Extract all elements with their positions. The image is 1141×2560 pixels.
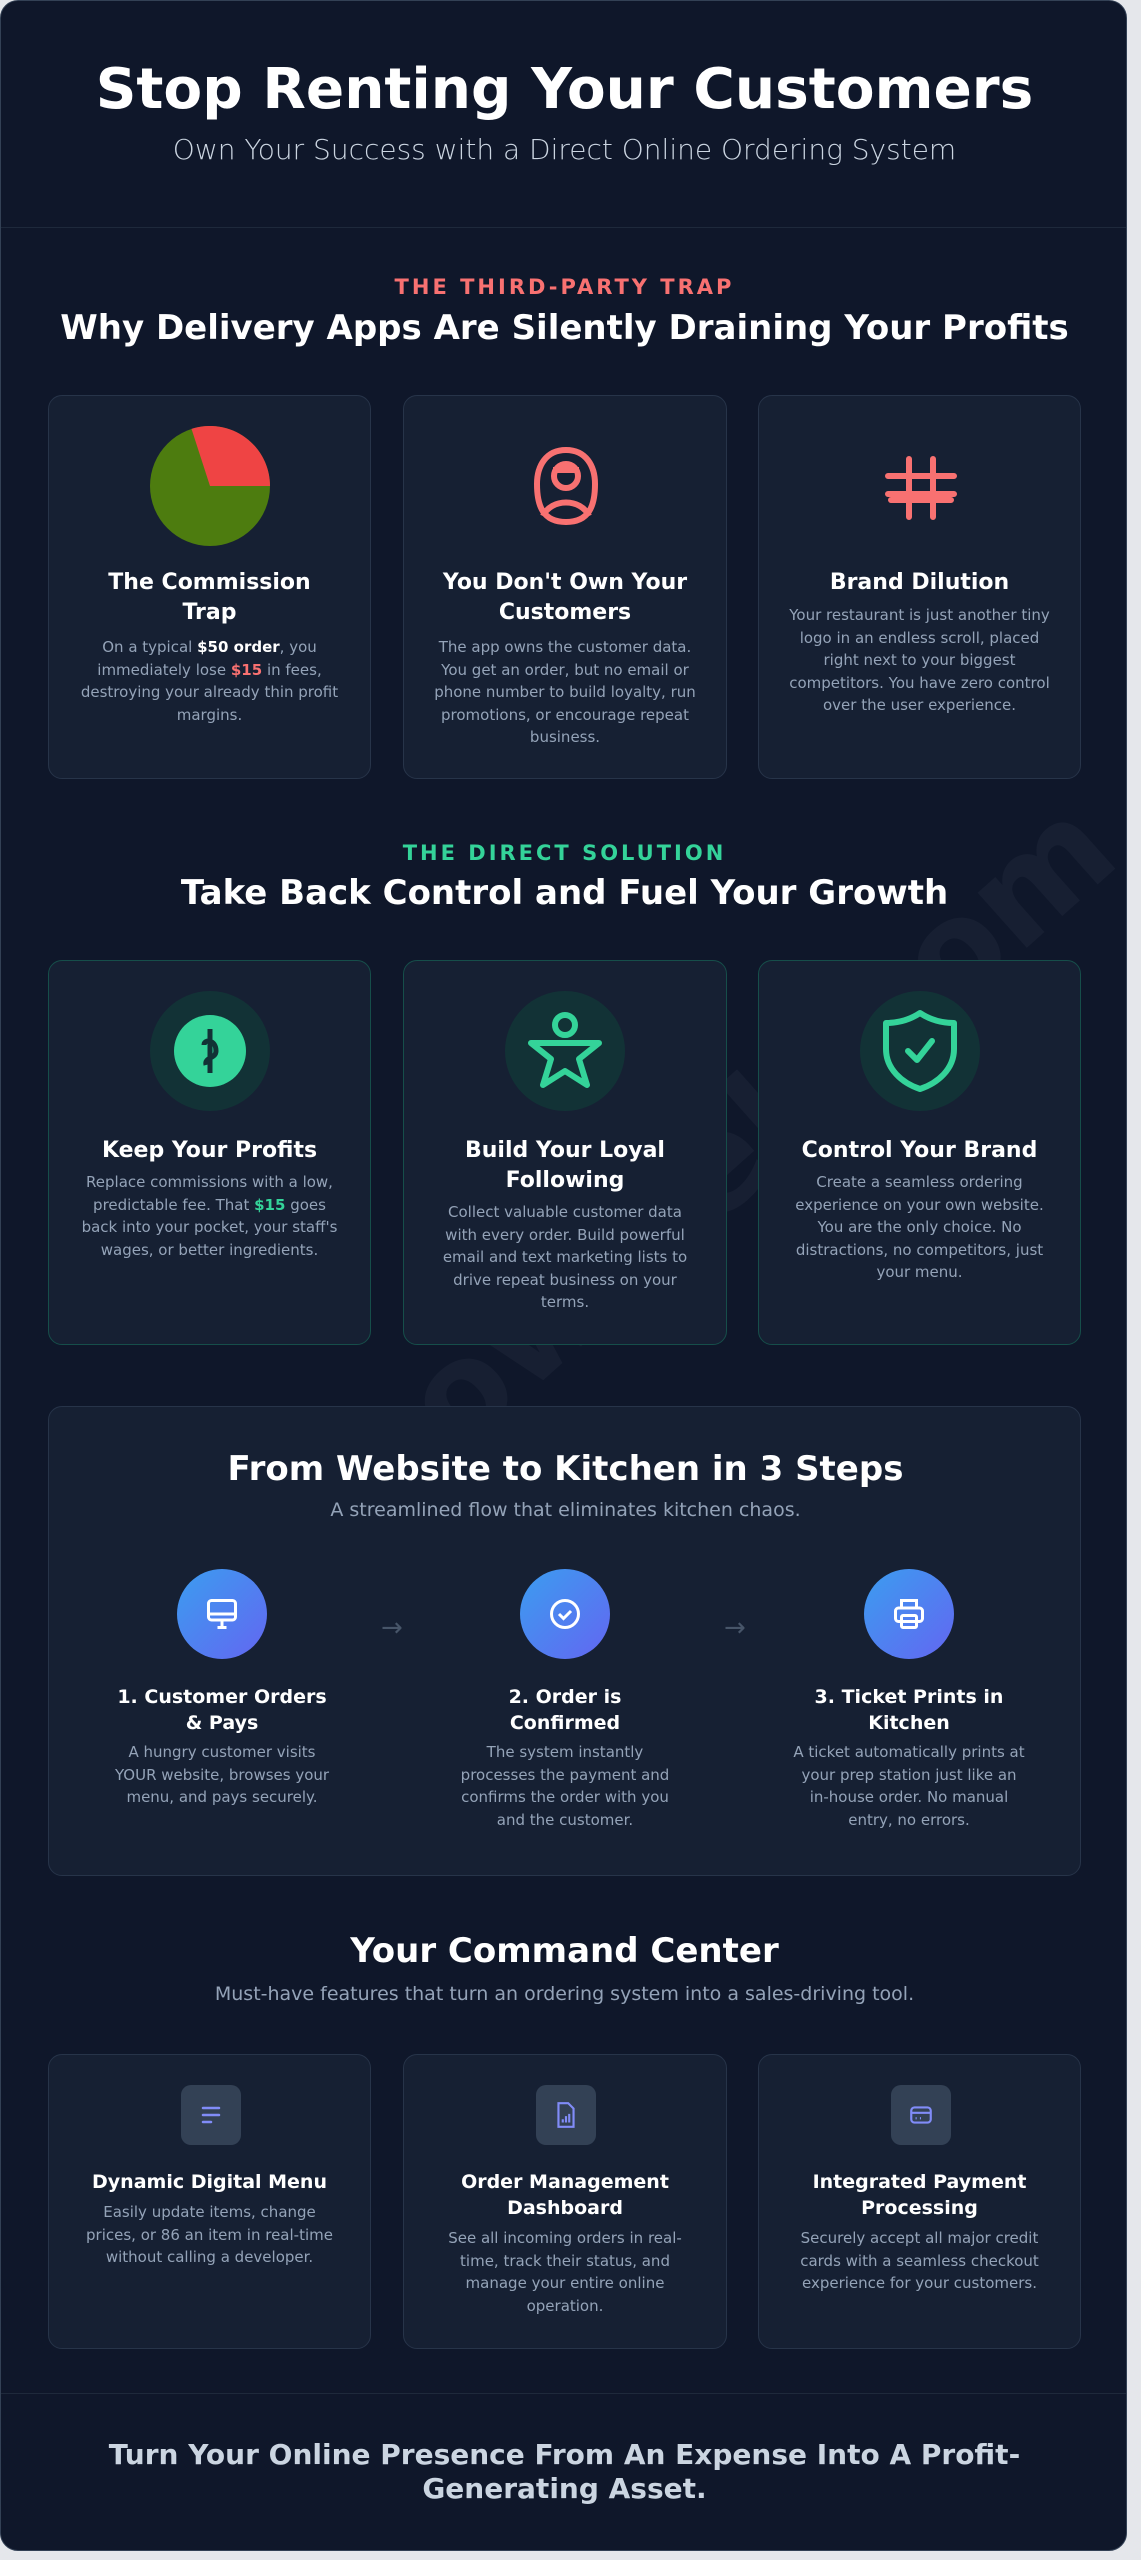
- icon: hashtag: [885, 456, 957, 520]
- panel: brand dilution: Your restaurant is just another tiny logo in an endless scroll, placed right next to your biggest competitors. You have zero control over the user experience.: [789, 606, 1050, 714]
- panel: order dashboard: See all incoming orders in real-time, track their status, and manage your entire online operation.: [448, 2229, 682, 2314]
- subtitle: command center: Must-have features that turn an ordering system into a sales-driving tool.: [215, 1983, 914, 2005]
- icon: printer: [864, 1569, 954, 1659]
- heading: take back control: Take Back Control and Fuel Your Growth: [181, 873, 948, 913]
- panel: 3 steps: [48, 1406, 1081, 1876]
- panel: digital menu: Dynamic Digital Menu: [92, 2171, 327, 2193]
- panel: commission trap: On a typical $50 order, you immediately lose $15 in fees, destroying your already thin profit margins.: [81, 638, 338, 724]
- step 2: The system instantly processes the payment and confirms the order with you and the customer.: [461, 1743, 669, 1828]
- icon: pie chart: [150, 426, 270, 546]
- icon: star person: [505, 991, 625, 1111]
- panel: loyal following: [403, 960, 727, 1345]
- step 3: 3. Ticket Prints in Kitchen: [815, 1686, 1003, 1734]
- panel: commission trap: The Commission Trap: [108, 570, 311, 625]
- panel: brand dilution: [758, 395, 1081, 779]
- footer tagline: Turn Your Online Presence From An Expense Into A Profit-Generating Asset.: [109, 2438, 1020, 2505]
- heading: why delivery apps: Why Delivery Apps Are Silently Draining Your Profits: [60, 308, 1069, 348]
- step 2: 2. Order is Confirmed: [509, 1686, 621, 1734]
- panel: control brand: Create a seamless ordering experience on your own website. You are the only choice. No distractions, no competitors, just your menu.: [795, 1173, 1044, 1281]
- panel: loyal following: Collect valuable customer data with every order. Build powerful email and text marketing lists to drive repeat business on your terms.: [443, 1203, 687, 1311]
- panel: keep profits: Replace commissions with a low, predictable fee. That $15 goes back into your pocket, your staff's wages, or better ingredients.: [82, 1173, 337, 1258]
- arrow 1: →: [381, 1613, 403, 1643]
- panel: control brand: [758, 960, 1081, 1345]
- subtitle: steps: A streamlined flow that eliminates kitchen chaos.: [330, 1499, 801, 1521]
- heading: steps: From Website to Kitchen in 3 Steps: [228, 1449, 903, 1489]
- panel: don't own customers: You Don't Own Your Customers: [443, 570, 687, 625]
- panel: don't own customers: The app owns the customer data. You get an order, but no email or phone number to build loyalty, run promotions, or encourage repeat business.: [434, 638, 696, 746]
- section label: direct solution: THE DIRECT SOLUTION: [403, 841, 726, 865]
- panel: payment processing: Integrated Payment Processing: [813, 2171, 1026, 2219]
- heading: command center: Your Command Center: [350, 1931, 779, 1971]
- icon: monitor: [177, 1569, 267, 1659]
- panel: control brand: Control Your Brand: [802, 1138, 1037, 1163]
- panel: payment processing: [758, 2054, 1081, 2349]
- subtitle: Own Your Success with a Direct Online Ordering System: [173, 133, 956, 166]
- icon: dollar coin: [150, 991, 270, 1111]
- panel: don't own customers: [403, 395, 727, 779]
- icon: credit card: [891, 2085, 951, 2145]
- step 1: 1. Customer Orders & Pays: [117, 1686, 327, 1734]
- step 3: A ticket automatically prints at your prep station just like an in-house order. No manual entry, no errors.: [793, 1743, 1025, 1828]
- panel: brand dilution: Brand Dilution: [830, 570, 1009, 595]
- icon: user: [534, 447, 598, 525]
- icon: report file: [536, 2085, 596, 2145]
- panel: loyal following: Build Your Loyal Following: [465, 1138, 665, 1193]
- watermark: lucknowweb.com: [68, 768, 1127, 1754]
- icon: shield check: [860, 991, 980, 1111]
- panel: order dashboard: [403, 2054, 727, 2349]
- panel: digital menu: Easily update items, change prices, or 86 an item in real-time without calling a developer.: [86, 2203, 333, 2266]
- step 3: [793, 1569, 1025, 1828]
- arrow 2: →: [724, 1613, 746, 1643]
- panel: digital menu: [48, 2054, 371, 2349]
- step 2: [461, 1569, 669, 1828]
- icon: menu lines: [181, 2085, 241, 2145]
- panel: payment processing: Securely accept all major credit cards with a seamless checkout experience for your customers.: [800, 2229, 1039, 2292]
- panel: keep profits: Keep Your Profits: [102, 1138, 317, 1163]
- footer: [1, 2393, 1128, 2553]
- panel: keep profits: [48, 960, 371, 1345]
- step 1: [115, 1569, 330, 1806]
- title: Stop Renting Your Customers: [96, 57, 1033, 122]
- header: [1, 1, 1128, 228]
- panel: commission trap: [48, 395, 371, 779]
- icon: check circle: [520, 1569, 610, 1659]
- step 1: A hungry customer visits YOUR website, browses your menu, and pays securely.: [115, 1743, 329, 1806]
- panel: order dashboard: Order Management Dashboard: [461, 2171, 669, 2219]
- section label: third-party trap: THE THIRD-PARTY TRAP: [395, 275, 734, 299]
